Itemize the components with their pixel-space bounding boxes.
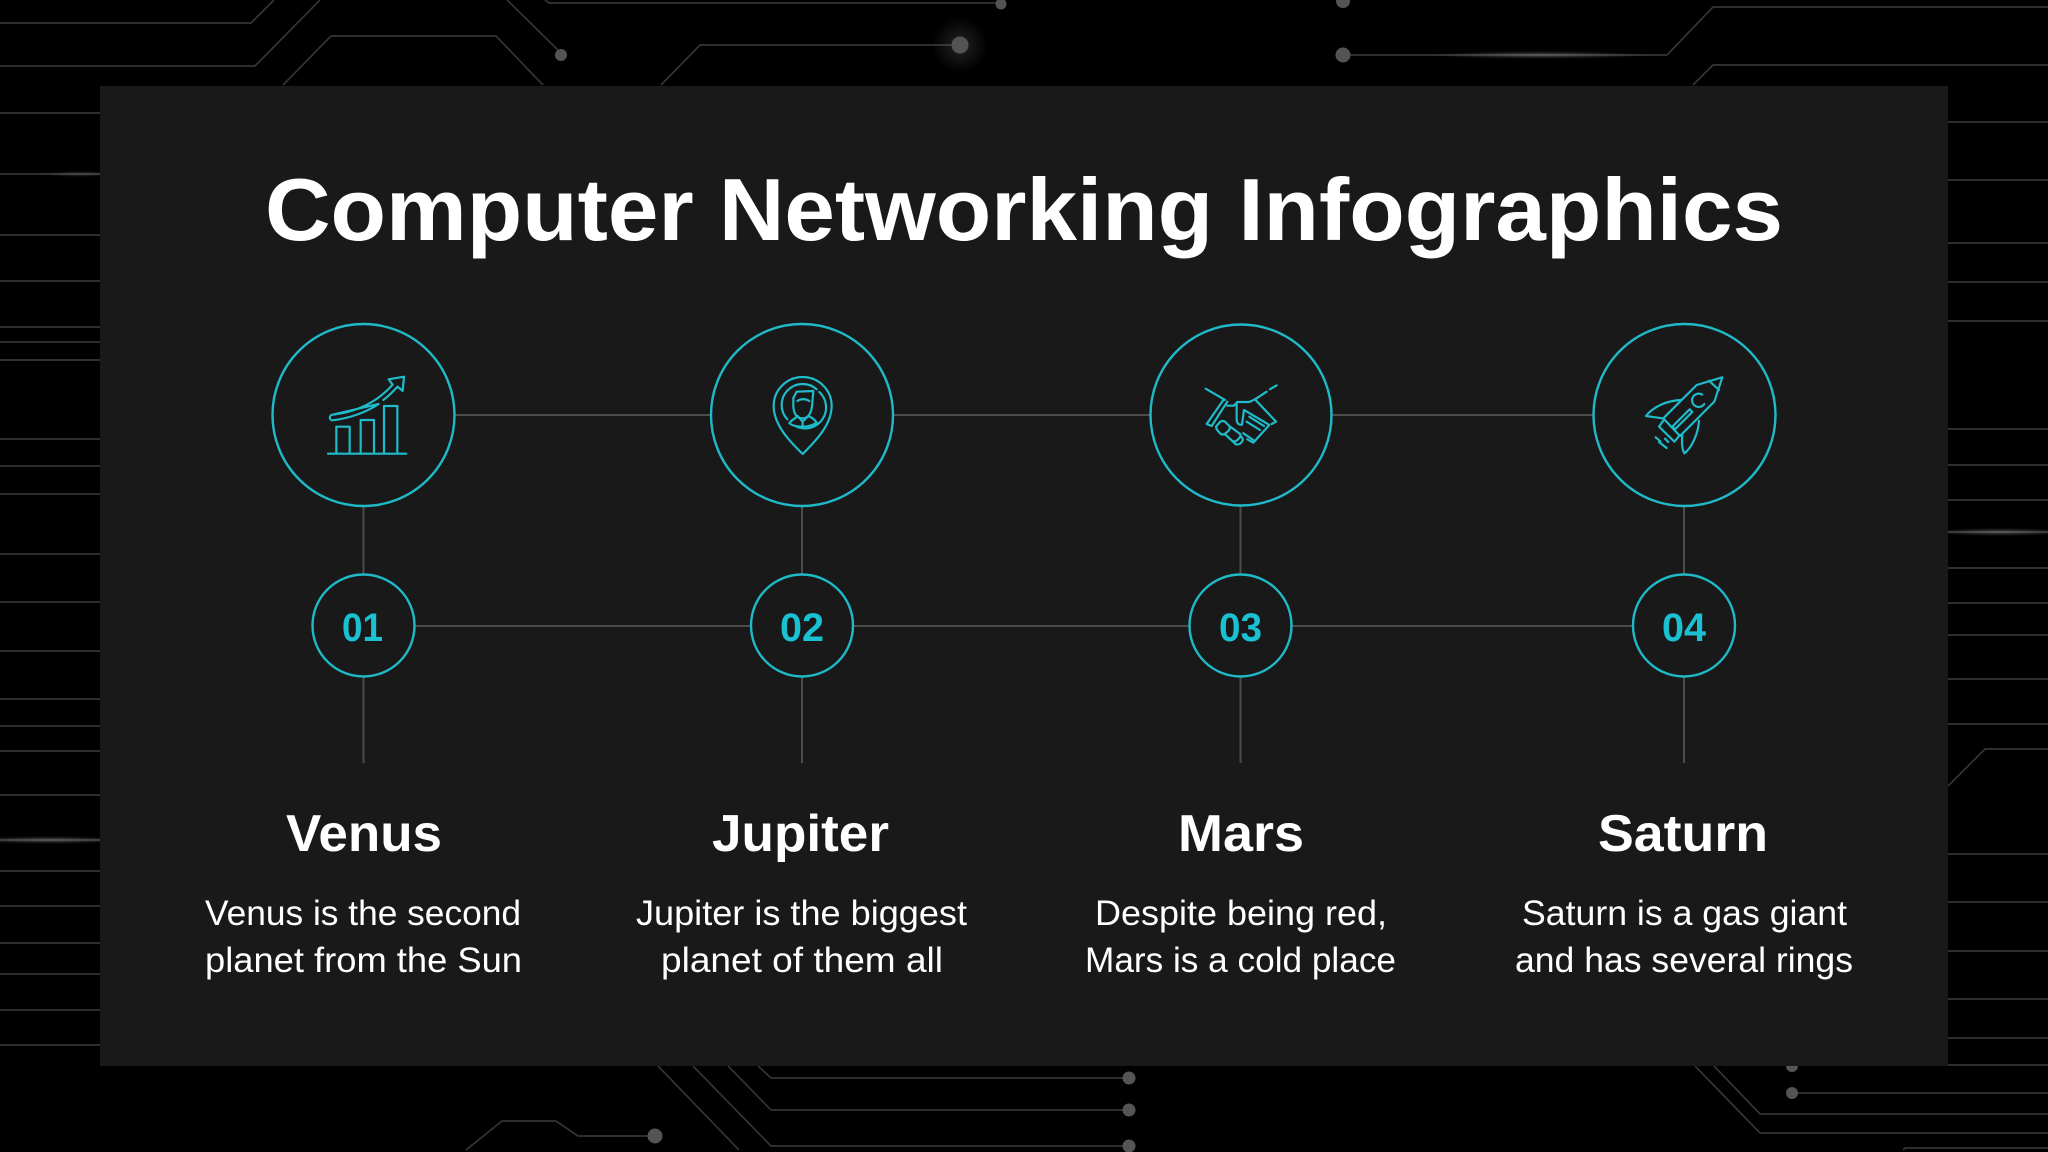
description: Venus bbox=[205, 894, 522, 980]
description: Jupiter: planet of them all bbox=[661, 941, 943, 980]
icon: location pin with person in circle bbox=[711, 324, 893, 506]
heading: Saturn: Saturn bbox=[1598, 805, 1768, 863]
description: Mars bbox=[1085, 894, 1396, 980]
description: Venus: planet from the Sun bbox=[205, 941, 522, 980]
description: Saturn: and has several rings bbox=[1515, 941, 1853, 980]
number badge 03 bbox=[1190, 574, 1292, 676]
connector lines between nodes bbox=[364, 415, 1684, 763]
description: Jupiter: Jupiter is the biggest bbox=[636, 894, 967, 933]
number badge 03: 03 bbox=[1219, 606, 1262, 650]
description: Saturn bbox=[1515, 894, 1853, 980]
icon: rocket in circle bbox=[1594, 324, 1776, 506]
description: Mars: Mars is a cold place bbox=[1085, 941, 1396, 980]
panel: main content card bbox=[100, 86, 1948, 1066]
number badge 02: 02 bbox=[780, 606, 824, 650]
column 2: Jupiter bbox=[636, 324, 967, 980]
number badge 02 bbox=[751, 574, 853, 676]
description: Mars: Despite being red, bbox=[1095, 894, 1387, 933]
number badge 04: 04 bbox=[1662, 606, 1707, 650]
description: Jupiter bbox=[636, 894, 967, 980]
title: Computer Networking Infographics bbox=[265, 160, 1783, 259]
column 1: Venus bbox=[205, 324, 522, 980]
number badge 01: 01 bbox=[342, 606, 383, 650]
icon: handshake in circle bbox=[1150, 324, 1332, 506]
column 4: Saturn bbox=[1515, 324, 1853, 980]
icon: growth chart in circle bbox=[272, 324, 454, 506]
column 3: Mars bbox=[1085, 324, 1396, 980]
description: Venus: Venus is the second bbox=[205, 894, 521, 933]
number badge 01 bbox=[312, 574, 414, 676]
number badge 04 bbox=[1633, 574, 1735, 676]
heading: Mars: Mars bbox=[1178, 805, 1304, 863]
heading: Jupiter: Jupiter bbox=[712, 805, 889, 863]
heading: Venus: Venus bbox=[286, 805, 442, 863]
description: Saturn: Saturn is a gas giant bbox=[1522, 894, 1847, 933]
